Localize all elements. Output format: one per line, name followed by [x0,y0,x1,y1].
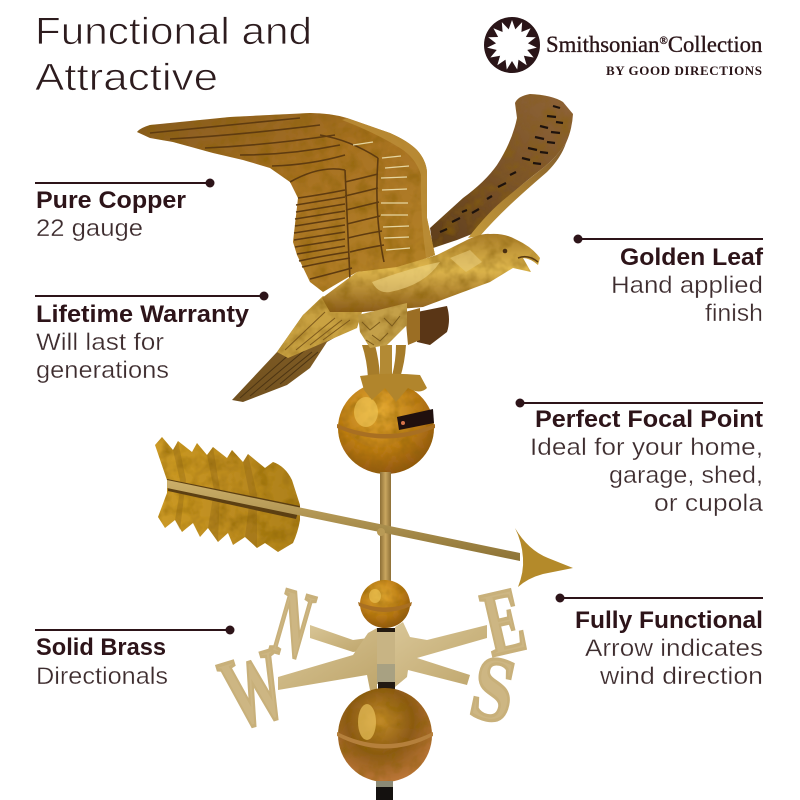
letter E: E [474,568,534,676]
callout: Fully Functional: wind direction [599,663,763,690]
callout: Fully Functional: Fully Functional [575,607,763,634]
callout: Fully Functional: Arrow indicates [585,635,763,662]
callout: Lifetime Warranty: Will last for [36,329,164,356]
eagle body and head [322,234,540,312]
title [35,11,312,99]
letter S: S [463,635,524,744]
callout: Golden Leaf [574,234,764,327]
callout: Solid Brass [35,626,234,690]
callout: Lifetime Warranty: generations [36,357,169,384]
black mounting pole [376,781,393,800]
callout: Lifetime Warranty: Lifetime Warranty [36,301,250,328]
letter W: W [209,626,299,751]
eagle tail [232,296,362,402]
large finial ball [337,688,433,782]
callout: Golden Leaf: Golden Leaf [620,244,764,271]
callout: Pure Copper: 22 gauge [36,215,143,242]
callout: Perfect Focal Point: garage, shed, [609,462,763,489]
arrowhead [515,528,573,587]
callout: Pure Copper: Pure Copper [36,187,186,214]
title: Functional and [35,11,312,53]
ball label [397,409,434,430]
letter N: N [262,569,323,680]
logo: Smithsonian Collection by Good Directions: Collection [668,32,762,57]
callout: Golden Leaf: finish [705,300,763,327]
eagle far wing [430,94,573,248]
eagle near wing [137,113,435,292]
weathervane illustration [137,94,573,800]
callout: Golden Leaf: Hand applied [611,272,763,299]
small finial ball [358,580,412,628]
eagle dark rear wing [417,306,449,345]
arrow fletching [155,437,300,552]
vertical pole [380,472,391,584]
logo: Smithsonian Collection by Good Directions: BY GOOD DIRECTIONS [606,63,762,78]
eagle talons on ball [360,374,427,402]
callout: Lifetime Warranty [35,292,268,384]
callout: Solid Brass: Directionals [36,663,168,690]
eagle thigh feathers [358,303,407,348]
callout: Perfect Focal Point: Ideal for your home, [530,434,763,461]
callout: Perfect Focal Point: or cupola [654,490,764,517]
callout: Perfect Focal Point [516,398,764,517]
logo: Smithsonian Collection by Good Directions [484,17,762,78]
upper finial ball [337,374,435,474]
callout: Pure Copper [35,178,214,242]
title: Attractive [35,57,218,99]
directional arms [278,622,487,690]
logo: Smithsonian Collection by Good Directions: ® [659,35,668,47]
logo: Smithsonian Collection by Good Directions: Smithsonian [546,32,659,57]
callout: Perfect Focal Point: Perfect Focal Point [535,406,763,433]
directional mount [377,628,396,690]
callout: Fully Functional [556,594,763,690]
eagle legs [362,308,420,378]
arrow shaft [167,479,520,561]
wing feather lines [150,118,384,280]
callout: Solid Brass: Solid Brass [36,634,166,661]
icon: Smithsonian sun [484,17,540,73]
